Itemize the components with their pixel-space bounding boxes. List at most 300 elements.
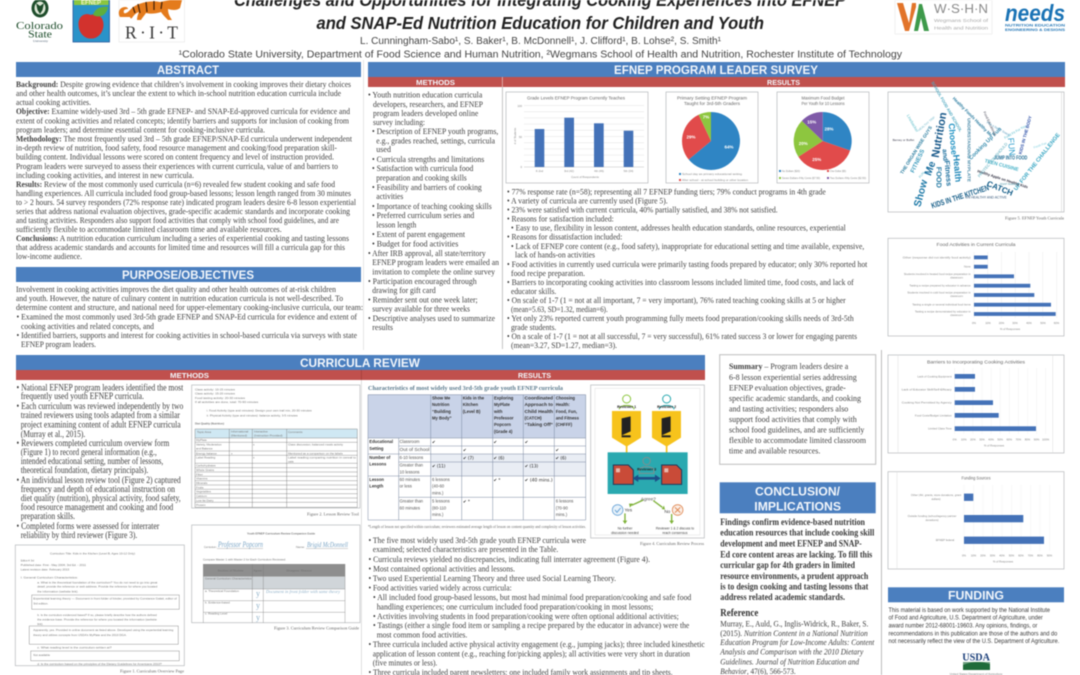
curricula methods list: frequency and depth of educational instruction on (21, 484, 175, 495)
table: characteristics of curricula: ✔ (463, 448, 467, 452)
logo: WSHN: Wegmans School of (934, 18, 989, 24)
chart: barriers to incorporating cooking activities: 20% (970, 437, 976, 441)
figure 1: curriculum overview page: the evidence base. Provide the reference for where you located the information (website (37, 617, 157, 621)
abstract heading (16, 62, 361, 77)
reviewer 3 comparison panel (608, 452, 688, 494)
reference (719, 608, 875, 675)
figure 2: lesson review tool: Vegetables (196, 490, 211, 494)
figure 5: word cloud of EFNEP youth curricula: UP FOR THE CHALLENGE (1013, 132, 1062, 192)
figure 3: curriculum review companion guide: b. Evidence-based (205, 600, 230, 604)
table: characteristics of curricula: with (493, 409, 503, 414)
curricula methods list: trained reviewers using tools adapted from a similar (21, 410, 181, 421)
chart: maximum food budget pie: Maximum Food Budget (802, 96, 845, 100)
figure 5: word cloud of EFNEP youth curricula: CATCH (986, 179, 1015, 198)
figure 2: lesson review tool: Food tasting activity: 20-30 minutes (195, 396, 246, 400)
table: characteristics of curricula: Choosing (556, 396, 575, 400)
figure 5: word cloud of EFNEP youth curricula: Healthy Apple on Healthy Kids (977, 169, 1028, 189)
abstract text: building content. Individual lessons were scored on content frequency and level of instruction provided. (16, 152, 334, 162)
purpose heading: PURPOSE/OBJECTIVES (122, 268, 254, 282)
chart: food activities in current curricula: 40% (1026, 321, 1032, 325)
figure 2: lesson review tool: ii. Physical Activity (type and minutes): balance activity, 3-5 minutes (207, 413, 298, 417)
funding text: recommendations in this publication are those of the authors and do (888, 630, 1058, 637)
chart: primary setting pie: Taught for 3rd-5th Graders (684, 101, 740, 106)
abstract text: to > 2 hours. 54 survey responders (72% response rate) indicated program leaders desire 6-8 lesson experiential (16, 198, 357, 207)
table: characteristics of curricula: ✔ (432, 440, 436, 444)
panel: summary callout: specific academic standards, and cooking (729, 393, 862, 403)
table: characteristics of curricula: ✔ (6) (556, 456, 567, 460)
curricula results list: • Curricula reviews yielded no discrepancies, indicating full interrater agreement (Figure 4). (368, 554, 650, 564)
reference: Analysis and Comparison with the 2010 Dietary (719, 648, 864, 657)
survey results list: food recipe preparation. (511, 268, 585, 278)
figure 5: word cloud of EFNEP youth curricula: KIDS IN THE BODY (1018, 115, 1033, 155)
purpose text: • Examined the most commonly used 3rd-5th grade EFNEP and SNAP-Ed curricula for evidence and extent of (16, 312, 357, 322)
table: characteristics of curricula: 6 lessons (556, 499, 573, 504)
table footnote: *Length of lesson not specified within curriculum; reviewers estimated average length of lesson on content quantity and complexity of lesson activities. (368, 524, 586, 529)
survey methods list: drawing for gift card (372, 285, 436, 295)
figure 5: word cloud of EFNEP youth curricula: Linebacker (906, 114, 920, 134)
survey methods list: activities (376, 191, 404, 201)
curricula methods list: intended educational setting, number of lessons, (21, 456, 163, 467)
abstract text: handling experiences. All curricula included food group-based lessons; lesson length ranged from 30 minutes (16, 189, 351, 198)
table: characteristics of curricula: (70-90 (556, 506, 568, 510)
figure 3: curriculum review companion guide: Brigid McDonnell (307, 540, 348, 549)
chart: maximum food budget pie: Two Dollars–Fifty Cents ($2.50) (830, 176, 866, 180)
figure 3: curriculum review companion guide: Section of Review (218, 568, 244, 572)
abstract heading: ABSTRACT (157, 63, 220, 77)
chart: primary setting pie (666, 92, 758, 183)
logo: needs: ENGINEERING & DESIGNS (1005, 28, 1066, 32)
figure 3: curriculum review companion guide: y (256, 589, 260, 598)
figure 5: word cloud of EFNEP youth curricula: SNAP Healthy (1000, 182, 1017, 186)
chart: maximum food budget pie: 28% (824, 126, 834, 132)
purpose text: EFNEP program leaders. (21, 340, 96, 349)
figure 2: lesson review tool: Carbohydrates (196, 464, 216, 468)
figure 3: curriculum review companion guide: y (256, 601, 260, 610)
chart: barriers to incorporating cooking activities: 30% (979, 437, 985, 441)
figure 5: word cloud of EFNEP youth curricula: ON HEALTHY AND ACTIVE (965, 195, 1008, 199)
curricula results list (368, 535, 705, 675)
chart: barriers to incorporating cooking activities: 50% (997, 437, 1004, 441)
chart: barriers to incorporating cooking activities: 80% (1025, 437, 1031, 441)
figure 1: curriculum overview page: a. What is the theoretical foundation of the curriculum? You do not need to go into great (37, 580, 157, 584)
table: characteristics of curricula: Approach to (524, 402, 553, 407)
chart: food activities in current curricula: 50% (1040, 321, 1046, 325)
chart: maximum food budget pie: Seven Dollars–Fifty Cents ($7.50) (782, 176, 820, 180)
curricula results list: most common food activities. (377, 630, 467, 640)
survey methods list: EFNEP program leaders were emailed an (372, 257, 500, 267)
figure 2: lesson review tool: (Mentioned) (231, 434, 247, 438)
table: characteristics of curricula: (Level B) (463, 409, 481, 414)
curricula methods list: reliability by third reviewer (Figure 3). (21, 530, 137, 541)
chart: food activities in current curricula: None (964, 265, 971, 269)
panel: EFNEP program leader survey (363, 60, 1065, 350)
panel: summary callout: EFNEP evaluation objectives, grade- (729, 382, 846, 392)
survey results list: (mean=5.63, SD=1.32, median=6). (511, 304, 608, 314)
chart: food activities in current curricula: % of Responses (1000, 327, 1021, 331)
figure 5: word cloud of EFNEP youth curricula (888, 81, 1064, 212)
panel: abstract (16, 62, 361, 261)
figure 2: lesson review tool: Protein (196, 503, 206, 507)
survey sub-heading: methods and results: METHODS (416, 78, 455, 87)
curricula results list: examined; selected characteristics are presented in the Table. (373, 544, 558, 554)
table: characteristics of curricula: Educational (369, 439, 393, 444)
chart: funding sources: 90% (1047, 554, 1053, 558)
conclusion heading: IMPLICATIONS (754, 499, 841, 513)
chart: barriers to incorporating cooking activities: Limited Class Time (928, 427, 952, 431)
funding text: not necessarily reflect the view of the U.S. Department of Agriculture. (888, 638, 1060, 645)
chart: barriers to incorporating cooking activities: Cooking Not Permitted by Agency (902, 401, 952, 405)
table: characteristics of curricula: My Body” (432, 416, 452, 420)
chart: grade levels currently taught: 3rd (42) (564, 169, 574, 173)
figure 1: curriculum overview page: theory and utilizes concepts from USDA’s MyPlate and the 2010 DGA. (33, 633, 127, 637)
decision: Agree? (641, 497, 656, 502)
chart: primary setting pie: Primary Setting EFNEP Program (677, 96, 747, 100)
figure 1: curriculum overview page: Edition #: 3rd (21, 559, 34, 563)
curricula results list: • Activities involving students in food preparation/cooking were often optional additional activities; (373, 611, 679, 621)
conclusion text: is to design cooking and tasting lessons that (720, 582, 869, 592)
conclusion text: education resources that include cooking skill (720, 528, 875, 538)
conclusion text: development and meet EFNEP and SNAP- (720, 538, 862, 550)
table: characteristics of curricula: ✔ * (494, 478, 500, 482)
panel: curricula review (15, 355, 705, 675)
survey methods list: • Importance of teaching cooking skills (372, 201, 492, 211)
figure 2 caption: Figure 2. Lesson Review Tool (307, 512, 360, 516)
curricula methods list: (Murray et al., 2015). (21, 429, 85, 440)
chart: food activities in current curricula: Students involved in cold food recipe preparation in (907, 290, 971, 294)
survey results list: • Reasons for satisfaction included: (507, 214, 614, 224)
chart: funding sources: 30% (990, 554, 996, 558)
decision: reach consensus (662, 531, 688, 535)
conclusion text (720, 517, 875, 603)
figure 1: curriculum overview page: detail; provide the reference or web address. Provide the reference for where you located (37, 585, 158, 589)
chart: food activities in current curricula: Tasting a single or several individual food items (912, 303, 971, 307)
purpose text: determine content and structure, and national need for upper-elementary cooking-inclusive curricula, our team: (16, 303, 363, 312)
survey methods list: lesson length (376, 220, 417, 230)
panel: summary callout: support food activities that comply with (729, 414, 857, 424)
curricula methods list: • National EFNEP program leaders identified the most (16, 382, 184, 394)
figure 1: curriculum overview page: b. Is the curriculum evidenced based? If so, please briefly describe how the authors defined (37, 613, 157, 617)
survey results list: • A variety of curricula are currently used (Figure 5). (507, 196, 668, 206)
curricula sub-heading: methods and results (16, 370, 705, 380)
figure 1: curriculum overview page: Experiential learning theory — Document in front folder of binder, provided by Constance Galati, editor of (33, 596, 177, 600)
figure 2: lesson review tool: Fiber (196, 472, 203, 476)
figure 5: word cloud of EFNEP youth curricula: Nutrition (930, 111, 950, 159)
chart: maximum food budget pie: Per Youth for 10 Lessons (802, 101, 844, 106)
purpose text: • Identified barriers, supports and interest for cooking activities in school-based curricula via surveys with state (16, 331, 357, 340)
abstract text: sufficiently flexible to accommodate limited classroom time and available resources. (16, 225, 282, 234)
panel: funding (888, 587, 1064, 675)
curricula results list: • Three curricula included active physical activity engagement (e.g., jumping jacks); three included kinesthetic (368, 639, 705, 649)
abstract text: including cooking activities, and interest in new curricula. (16, 171, 194, 180)
table: characteristics of curricula: ✔ (13) (525, 464, 539, 468)
curricula methods list: food resource management and cooking and food (21, 502, 174, 513)
table: characteristics of curricula: Exploring (494, 396, 514, 400)
logo: RIT tiger: R·I·T (125, 22, 178, 42)
chart: barriers to incorporating cooking activities: Lack of Cooking Equipment (917, 374, 952, 378)
chart: food activities in current curricula: classroom (950, 313, 964, 317)
logo: WSHN: Health and Nutrition (934, 26, 988, 32)
figure 5: word cloud of EFNEP youth curricula: KIDS IN THE KITCHEN (930, 183, 990, 210)
chart: barriers to incorporating cooking activities: 90% (1034, 437, 1040, 441)
figure 3: curriculum review companion guide: a. Theoretical Foundation (205, 589, 239, 593)
conclusion text: Ed core content areas are lacking. To fill this (720, 550, 873, 560)
decision (611, 497, 694, 535)
abstract text: Conclusions: A nutrition education curriculum including a series of experiential cooking and tasting lessons (16, 234, 349, 243)
table: characteristics of curricula: (CHFFF) (556, 422, 573, 427)
table: characteristics of curricula: Out of School (400, 447, 430, 452)
funding heading: FUNDING (948, 588, 1004, 602)
chart: primary setting pie: 7% (703, 114, 709, 120)
chart: funding sources: dollars) (931, 497, 941, 501)
reference: Murray, E., Auld, G., Inglis-Widrick, R., Baker, S. (720, 619, 868, 628)
figure 2: lesson review tool: Calcium (196, 494, 207, 498)
chart: funding sources: 50% (1009, 554, 1015, 558)
curricula methods list: (Figure 1) to record general information (e.g., (21, 447, 157, 458)
abstract text: Objective: Examine widely-used 3rd – 5th grade EFNEP- and SNAP-Ed-approved curricula for evidence and (16, 107, 350, 116)
figure 1: curriculum overview page: Published date: First - May 2004; 3rd Ed. - 2011 (21, 563, 86, 567)
figure 2: lesson review tool: x (253, 442, 255, 446)
chart: funding sources: 70% (1028, 554, 1034, 558)
figure 3: curriculum review companion guide: Agree (253, 568, 262, 572)
table: characteristics of curricula: Lessons (369, 462, 387, 466)
curricula methods list: • Each curriculum was reviewed independently by two (16, 402, 184, 412)
curricula results list: handling experiences; one curriculum included food preparation/cooking in most lessons; (377, 602, 653, 612)
chart: primary setting pie: School day as primary educational setting (682, 172, 743, 176)
chart: funding sources: 0% (962, 554, 967, 558)
chart: grade levels currently taught: 50 (519, 135, 522, 139)
figure 3: curriculum review companion guide: Name: (296, 545, 305, 549)
figure 5: word cloud of EFNEP youth curricula: Fitness (943, 160, 954, 186)
table: characteristics of curricula (368, 395, 586, 520)
figure 5: word cloud of EFNEP youth curricula: FUN (918, 171, 926, 179)
curricula results list: • Two used Experiential Learning Theory and three used Social Learning Theory. (368, 573, 616, 583)
chart: funding sources: 40% (999, 554, 1005, 558)
table: characteristics of curricula: Kids in the (463, 396, 485, 400)
curricula methods list: theoretical foundation, dietary principals). (21, 465, 148, 476)
survey methods list: used (376, 144, 392, 154)
survey methods list: • Budget for food activities (372, 238, 459, 248)
chart: funding sources: EFNEP federal (936, 538, 955, 542)
figure 5: word cloud of EFNEP youth curricula: Cooking Up Fun (968, 126, 1004, 162)
funding text: of Food and Agriculture, U.S. Department of Agriculture, under (888, 615, 1043, 622)
reviewer 3 comparison panel: Reviewer 3 (637, 468, 656, 472)
figure 2: lesson review tool: i. Food Activity (type and minutes): Design your own trail mix, 20-30 minutes (207, 409, 312, 413)
abstract text: Methodology: The most frequently used 3rd – 5th grade EFNEP/SNAP-Ed curricula underwent independent (16, 134, 353, 144)
survey methods list: • After IRB approval, all state/territory (368, 248, 486, 258)
survey methods list: survey including: (373, 117, 425, 127)
table: characteristics of curricula: Show Me (432, 396, 451, 400)
chart: food activities in current curricula: 60% (1054, 321, 1060, 325)
table: characteristics of curricula: 60 minutes (400, 477, 420, 482)
survey methods list: • Satisfaction with curricula food (372, 163, 474, 173)
table: characteristics of curricula: Coordinated (524, 396, 553, 400)
affiliations: ¹Colorado State University, Department of Food Science and Human Nutrition, ²Wegmans School of Health and Nutrition, Rochester Institute of Technology (179, 50, 902, 60)
survey methods list: • Participation encouraged through (368, 276, 477, 286)
table: characteristics of curricula: and Fitness (556, 416, 580, 420)
table: characteristics of curricula: Setting (369, 446, 384, 451)
survey results list: • Barriers to incorporating cooking activities into classroom lessons included limited time, food costs, and lack of (507, 277, 854, 287)
table: characteristics of curricula: ✔ (11) (432, 464, 446, 468)
curricula results list: • All included food group-based lessons, but most had minimal food preparation/cooking and safe food (373, 592, 692, 602)
chart: funding sources (888, 472, 1064, 569)
survey heading: EFNEP PROGRAM LEADER SURVEY (614, 63, 818, 77)
figure 2: lesson review tool: oats (288, 460, 294, 464)
table: characteristics of curricula: Kitchen (463, 402, 478, 407)
panel: summary callout (720, 355, 876, 464)
table: characteristics of curricula: Health: (556, 402, 570, 407)
table: characteristics of curricula: “Taking Off” (524, 422, 553, 427)
logo: Colorado State University: Colorado (16, 21, 63, 32)
curricula methods list: frequently used youth EFNEP curricula. (21, 391, 144, 402)
figure 5: word cloud of EFNEP youth curricula: Food Fit For You (1003, 124, 1027, 140)
chart: food activities in current curricula: Tasting a recipe prepared by educator in advance (909, 284, 971, 288)
logo: USDA (950, 652, 1003, 675)
survey methods list: results (372, 322, 394, 332)
figure 4: curriculum review process diagram (591, 385, 704, 538)
figure 2: lesson review tool: Diet Quality (Nutrition) (195, 421, 224, 425)
table heading: Characteristics of most widely used 3rd-5th grade youth EFNEP curricula (368, 385, 563, 392)
chart: funding sources: 80% (1037, 554, 1043, 558)
figure 1: curriculum overview page: d. Is the curriculum based on the principles of the Dietary Guidelines for Americans 2010? (37, 662, 162, 666)
chart: maximum food budget pie: One Dollar ($5) (830, 169, 846, 173)
panel: summary callout: and tasting activities; responders also (729, 404, 849, 414)
figure 2: lesson review tool: MyPlate (196, 438, 207, 442)
figure 4 caption: Figure 4. Curriculum Review Process (640, 541, 704, 546)
table: characteristics of curricula: “Building (432, 409, 451, 414)
chart: food activities in current curricula: classroom (950, 276, 964, 280)
curricula methods list: preparation skills. (21, 512, 75, 522)
figure 1: curriculum overview page: I. General Curriculum Characteristics: (21, 575, 78, 579)
chart: barriers to incorporating cooking activities: % of Responses (984, 444, 1005, 448)
decision: No (664, 509, 671, 514)
table: characteristics of curricula: ✔ (525, 440, 529, 444)
survey results list: • 23% were satisfied with current curricula, 40% partially satisfied, and 38% not satisfied. (507, 204, 778, 214)
decision: discussion needed (611, 531, 639, 535)
table: characteristics of curricula: ✔ * (463, 499, 470, 504)
table: characteristics of curricula: 10 lessons (400, 470, 420, 474)
figure 1 caption: Figure 1. Curriculum Overview Page (120, 668, 184, 674)
chart: barriers to incorporating cooking activities: 40% (988, 437, 994, 441)
chart: funding sources: donations) (925, 518, 939, 522)
decision: No further (618, 526, 633, 530)
figure 2: lesson review tool: Class activity: 10-15 minutes (195, 387, 236, 391)
figure 2: lesson review tool: Class discussion; balanced meals activity (288, 442, 344, 446)
figure 1: curriculum overview page: Apparently, yes. Provided in online document as listed above. Developed using the experiential learning (33, 628, 174, 632)
logo: WSHN: W·S·H·N (934, 2, 988, 16)
figure 2: lesson review tool: Topic Area (197, 430, 211, 434)
chart: food activities in current curricula (888, 238, 1064, 336)
purpose text: and youth. However, the nature of culinary content in nutrition education curricula is not well-described. To (16, 294, 343, 303)
chart: grade levels currently taught (506, 92, 648, 183)
logo: needs: needs (1005, 0, 1065, 26)
survey results list: educator skills. (511, 286, 556, 296)
logo: needs: NUTRITION EDUCATION (1005, 24, 1066, 28)
purpose text (16, 285, 363, 349)
figure 2: lesson review tool (192, 385, 360, 508)
table: characteristics of curricula: Classroom (400, 439, 420, 444)
survey results list: • 77% response rate (n=58); representing all 7 EFNEP funding tiers; 79% conduct programs in 4th grade (507, 186, 826, 196)
table: characteristics of curricula: mins.) (432, 490, 444, 495)
figure 3: curriculum review companion guide: Compare Master 1 with Master 2 for Each Curriculum Reviewed. (203, 557, 286, 561)
survey sub-heading: methods and results (368, 77, 1065, 87)
chart: barriers to incorporating cooking activities: Barriers to Incorporating Cooking Activities (927, 359, 1025, 364)
curricula results list: (five minutes or less). (373, 658, 437, 668)
chart: funding sources: Other (4H, grants, store donations, grant (911, 493, 961, 497)
logo: Colorado State University: State (28, 30, 53, 40)
curricula results list: • The five most widely used 3rd-5th grade youth EFNEP curricula were (368, 535, 586, 545)
figure 5: word cloud of EFNEP youth curricula: Barney or Buffet (893, 138, 914, 142)
figure 5: word cloud of EFNEP youth curricula: FUN (1006, 137, 1017, 156)
chart: maximum food budget pie: 15% (807, 120, 816, 124)
table: characteristics of curricula: Greater than (400, 462, 424, 468)
panel: summary callout: 6-8 lesson experiential series addressing (729, 372, 857, 382)
survey methods list: preparation and cooking skills (376, 172, 467, 182)
figure 2: lesson review tool: (Instruction Provided) (254, 434, 283, 438)
chart: funding sources: 60% (1018, 554, 1024, 558)
figure 5: word cloud of EFNEP youth curricula: HEALTHY TRIP (917, 115, 936, 132)
curricula methods list: • Reviewers completed curriculum overview form (16, 438, 170, 449)
table: characteristics of curricula: Greater than (400, 499, 424, 504)
survey methods list: survey available for three weeks (372, 304, 470, 314)
reviewer 2: Reviewer 2 (657, 405, 676, 409)
figure 2: lesson review tool: Label reading comparing nutrition in cereal to (288, 456, 356, 460)
survey methods list: • Preferred curriculum series and (372, 210, 475, 220)
figure 5: word cloud of EFNEP youth curricula: FITNESS (910, 149, 926, 174)
curricula results list: • Food activities varied widely across curricula: (368, 582, 512, 592)
table: characteristics of curricula: Lesson (369, 477, 384, 482)
figure 5: word cloud of EFNEP youth curricula: Pick a Better Snack (986, 120, 1011, 137)
chart: food activities in current curricula: 0% (972, 321, 977, 325)
table: characteristics of curricula: mins.) (432, 512, 444, 517)
survey methods list: • Feasibility and barriers of cooking (372, 182, 482, 192)
decision: Yes (625, 507, 633, 512)
table: characteristics of curricula: (Grade 4) (494, 429, 513, 434)
chart: grade levels currently taught: # of Students (513, 127, 517, 144)
survey results list: grade students. (511, 322, 556, 332)
reference: Reference (720, 608, 759, 619)
curricula methods list: • An individual lesson review tool (Figure 2) captured (16, 475, 181, 486)
survey results list: • Yet only 23% reported current youth programming fully meets food preparation/cooking skills needs of 3rd-5th (507, 313, 854, 323)
abstract text: Background: Despite growing evidence that children’s involvement in cooking improves their dietary choices (16, 80, 351, 89)
table: characteristics of curricula: 6-10 lessons (400, 455, 423, 460)
table: characteristics of curricula: Popcorn (494, 422, 511, 427)
abstract text: and other health outcomes, it’s unclear the extent to which in-school nutrition education curricula include (16, 89, 341, 98)
reference: Guidelines. Journal of Nutrition Education and (720, 657, 860, 666)
figure 5: word cloud of EFNEP youth curricula: Show (913, 178, 931, 208)
survey methods list: • Description of EFNEP youth programs, (372, 126, 498, 136)
survey results list: • On a scale of 1-7 (1 = not at all successful, 7 = very successful), 61% rated success 3 or lower for engaging parents (507, 331, 857, 341)
figure 3: curriculum review companion guide: y (256, 613, 260, 622)
logo: RIT tiger (119, 0, 184, 42)
figure 5: word cloud of EFNEP youth curricula: TEEN CUISINE (984, 158, 1020, 173)
figure 2: lesson review tool: Vitamins (196, 477, 208, 481)
figure 5 caption: Figure 5. EFNEP Youth Curricula (1005, 216, 1064, 220)
purpose text: cooking activities and related concepts, and (21, 322, 154, 331)
survey methods list: • Extent of parent engagement (372, 229, 465, 239)
conclusion text: resource environments, a prudent approach (720, 571, 869, 582)
abstract text: program leaders; and determine essential content for cooking-inclusive curricula. (16, 126, 265, 134)
chart: food activities in current curricula: Tasting a recipe demonstrated by educator in (915, 310, 971, 314)
curricula methods list: • Completed forms were assessed for interrater (16, 521, 160, 532)
figure 1: curriculum overview page: link). (37, 622, 43, 626)
survey methods list: • Youth nutrition education curricula (368, 90, 482, 100)
figure 2: lesson review tool: Mentioned as a comparison on the labels (288, 452, 343, 456)
chart: maximum food budget pie (777, 92, 869, 183)
funding heading (888, 587, 1064, 602)
figure 2: lesson review tool: Fruits (196, 485, 204, 489)
figure 3 caption: Figure 3. Curriculum Review Comparison Guide (274, 626, 359, 630)
table: characteristics of curricula: mins.) (556, 512, 568, 517)
